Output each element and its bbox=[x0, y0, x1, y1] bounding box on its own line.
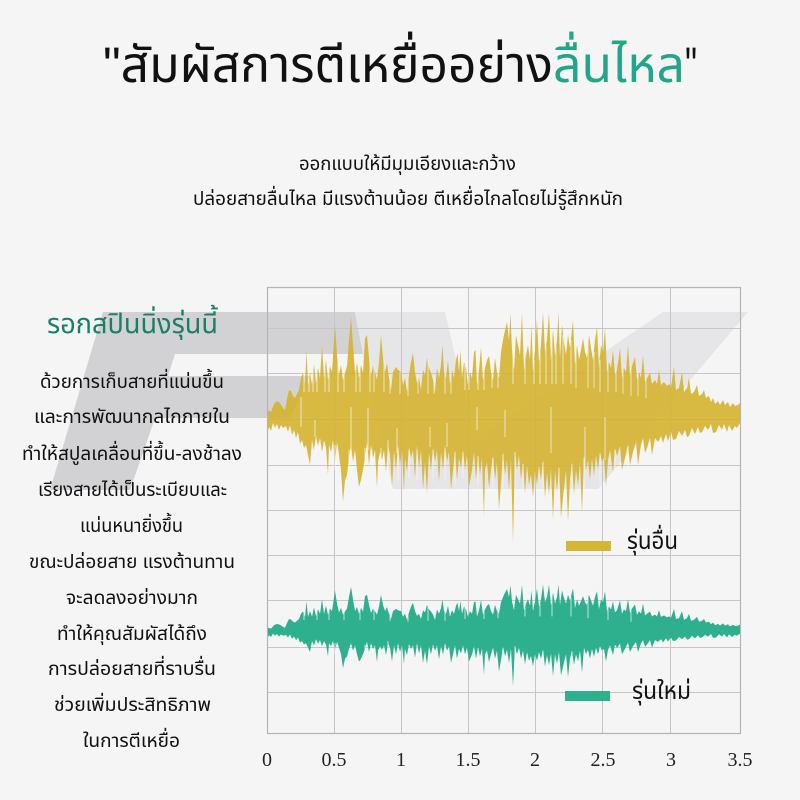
title: "สัมผัสการตีเหยื่ออย่าง bbox=[103, 31, 553, 93]
subtitle text bbox=[193, 152, 623, 211]
chart: waveform comparison bbox=[262, 288, 752, 771]
waveform: other models (gold) bbox=[268, 312, 740, 543]
waveform: new model (teal) bbox=[268, 585, 740, 686]
legend: other models: รุ่นอื่น bbox=[627, 524, 678, 556]
legend: new model: รุ่นใหม่ bbox=[632, 677, 691, 706]
description text block: และการพัฒนากลไกภายใน bbox=[34, 407, 230, 428]
description text block: จะลดลงอย่างมาก bbox=[66, 586, 198, 609]
description text block: ขณะปล่อยสาย แรงต้านทาน bbox=[29, 550, 235, 573]
panel heading: spinning reel: รอกสปินนิ่งรุ่นนี้ bbox=[47, 304, 218, 340]
title: ลื่นไหล bbox=[553, 31, 685, 93]
description text block bbox=[22, 368, 242, 752]
x axis labels: 0.5 bbox=[322, 749, 346, 771]
x axis labels: 1.5 bbox=[456, 749, 480, 771]
description text block: เรียงสายได้เป็นระเบียบและ bbox=[38, 478, 227, 501]
x axis labels: 0 bbox=[262, 749, 272, 771]
x axis labels: 2.5 bbox=[590, 749, 616, 771]
chart grid bbox=[268, 288, 740, 734]
description text block: ในการตีเหยื่อ bbox=[83, 727, 180, 752]
x axis labels: 2 bbox=[530, 749, 540, 771]
description text block: ด้วยการเก็บสายที่แน่นขึ้น bbox=[40, 368, 224, 393]
description text block: ช่วยเพิ่มประสิทธิภาพ bbox=[54, 692, 211, 716]
x axis labels bbox=[262, 749, 752, 771]
legend: other models bbox=[566, 524, 678, 556]
legend: new model bbox=[565, 677, 691, 706]
description text block: การปล่อยสายที่ราบรื่น bbox=[48, 655, 216, 680]
background watermark logo bbox=[50, 312, 748, 490]
x axis labels: 3 bbox=[666, 749, 676, 771]
subtitle text: ปล่อยสายลื่นไหล มีแรงต้านน้อย ตีเหยื่อไกลโดยไม่รู้สึกหนัก bbox=[193, 185, 623, 211]
title: " bbox=[685, 37, 697, 93]
x axis labels: 3.5 bbox=[728, 749, 752, 771]
description text block: ทำให้คุณสัมผัสได้ถึง bbox=[57, 622, 207, 645]
x axis labels: 1 bbox=[396, 749, 406, 771]
description text block: ทำให้สปูลเคลื่อนที่ขึ้น-ลงช้าลง bbox=[22, 440, 242, 466]
subtitle text: ออกแบบให้มีมุมเอียงและกว้าง bbox=[299, 152, 516, 175]
description text block: แน่นหนายิ่งขึ้น bbox=[80, 512, 183, 537]
title bbox=[103, 31, 697, 93]
